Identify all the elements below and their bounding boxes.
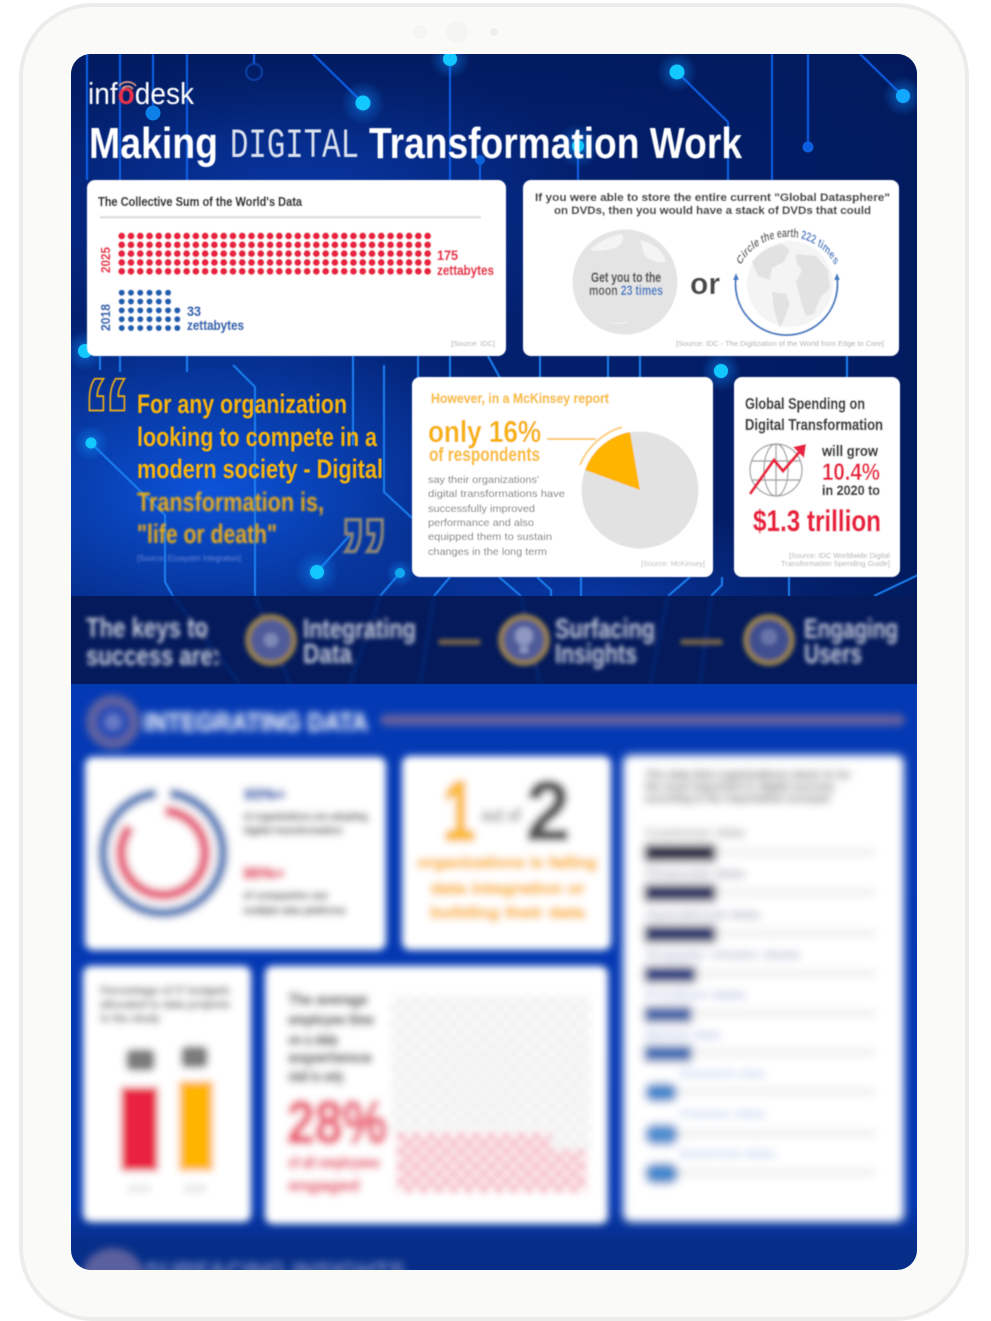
stat: only 16% (428, 414, 541, 466)
next section heading: SURFACING INSIGHTS (145, 1258, 405, 1285)
pull quote: Transformation is, (137, 487, 324, 517)
title: Making (89, 119, 218, 168)
bar labels (645, 828, 801, 1160)
dot chart: 2018 (98, 288, 244, 333)
big numerals: 1 (443, 764, 475, 858)
key: engaging users: Engaging (804, 613, 898, 644)
yellow text: building their data (430, 903, 586, 922)
icon: globe with rising arrow (750, 444, 806, 496)
key: engaging users (746, 613, 898, 669)
body text: on a data (288, 1030, 338, 1049)
stat: 85%: 85%+ (243, 864, 285, 883)
dot chart: 2018: zettabytes (187, 317, 244, 333)
growth text: $1.3 trillion (753, 505, 881, 538)
dot chart: 2018: 33 (187, 303, 201, 319)
panel: 28% waffle (265, 966, 608, 1224)
panel heading (100, 985, 230, 1025)
stat: 85%: multiple data platforms (243, 905, 346, 917)
stat: 93%: of organizations are adopting (243, 811, 368, 823)
earth illustration with orbit arrow: Circle the earth 222 times (736, 228, 838, 265)
pull quote: looking to compete in a (137, 422, 378, 452)
spending heading (745, 396, 883, 434)
pull quote: "life or death" (137, 519, 277, 549)
spending heading: Global Spending on (745, 396, 865, 413)
source: [Source: IDC - The Digitization of the World from Edge to Core] (676, 339, 884, 348)
band heading (86, 612, 220, 671)
stat: only 16%: only 16% (428, 414, 541, 449)
pull quote (88, 377, 386, 564)
key: engaging users: Users (804, 638, 862, 669)
yellow text: organizations is failing (417, 853, 597, 872)
body text: successfully improved (428, 503, 535, 515)
source: [Source: McKinsey] (641, 559, 705, 568)
stat: 85% (243, 864, 346, 917)
section: integrating data (71, 684, 917, 1312)
pie chart: 16% (547, 427, 698, 548)
source: Transformation Spending Guide] (781, 559, 890, 568)
key: integrating data: Data (303, 638, 352, 669)
band heading: The keys to (86, 612, 208, 643)
key: surfacing insights: Surfacing (555, 613, 655, 644)
key: integrating data: Integrating (303, 613, 416, 644)
big numerals: out of (481, 805, 521, 827)
circuit lines (87, 54, 918, 596)
panel: donut statistics (85, 757, 386, 950)
big numerals: 2 (526, 764, 570, 858)
yellow text (417, 853, 597, 922)
body text: changes in the long term (428, 546, 547, 558)
panel: McKinsey report (412, 377, 713, 577)
panel heading: the most important to digital success (645, 781, 835, 793)
stat: 85%: of companies use (243, 890, 328, 902)
stat: 28%: 28% (287, 1089, 387, 1156)
source (781, 551, 890, 568)
bar labels: Market data (645, 1030, 721, 1041)
body text: employee time (288, 1010, 374, 1029)
background: dark blue circuit board (71, 54, 917, 596)
dot chart: 2018: 2018 (98, 304, 113, 331)
bar labels: Supply chain data (645, 950, 801, 961)
moon illustration: Get you to the (591, 270, 661, 285)
pull quote: modern society - Digital (137, 454, 383, 484)
bar labels: Customer data (645, 828, 746, 839)
connector (438, 639, 481, 645)
glowing circuit nodes (65, 39, 923, 594)
dot chart: 2025: 175 (437, 247, 458, 263)
body text (428, 474, 565, 558)
body text: experience (288, 1048, 372, 1067)
section heading: INTEGRATING DATA (144, 707, 368, 737)
band: the keys to success (71, 596, 917, 684)
panel heading: in the study (100, 1013, 161, 1025)
body text: The average (288, 990, 368, 1009)
source: [Source: IDC] (451, 339, 495, 348)
source: [Source: IDC Worldwide Digital (789, 551, 890, 560)
body text: say their organizations' (428, 474, 539, 486)
key: surfacing insights: Insights (555, 638, 637, 669)
body text: visit is only (288, 1067, 344, 1086)
key: surfacing insights (501, 613, 655, 669)
pull quote: For any organization (137, 389, 347, 419)
panel heading: Percentage of IT budgets (100, 985, 230, 997)
moon illustration: moon 23 times (589, 283, 663, 298)
next section heading (81, 1248, 405, 1312)
panel heading: The data that organizations deem to be (645, 769, 850, 781)
key: integrating data (248, 613, 416, 669)
bar chart (121, 1046, 213, 1195)
icon: opening quote: “ (82, 355, 132, 480)
panel intro text (535, 192, 890, 217)
moon illustration (572, 230, 678, 334)
title: DIGITAL (230, 122, 359, 170)
big numerals (443, 764, 570, 858)
bar chart: 2019 (128, 1184, 151, 1195)
body text: performance and also (428, 517, 534, 529)
title (90, 126, 742, 168)
band heading: success are: (86, 640, 220, 671)
bar rows (644, 844, 875, 1184)
panel: ranked bars (623, 755, 904, 1222)
panel intro text: on DVDs, then you would have a stack of DVDs that could (554, 205, 871, 217)
bar labels: Operational data (645, 910, 761, 921)
growth text (753, 443, 881, 538)
logo: infodesk: infodesk (88, 76, 194, 111)
dot chart: 2025: 2025 (98, 247, 113, 273)
stat: 28% (287, 1089, 387, 1195)
stat: 93% (243, 785, 368, 837)
or: or (690, 266, 720, 301)
stat: 93%: 93%+ (244, 785, 286, 804)
panel heading: allocated to data projects (100, 999, 230, 1011)
stat: 28%: engaged (288, 1176, 360, 1195)
growth text: will grow (821, 443, 878, 460)
report heading: However, in a McKinsey report (431, 390, 609, 406)
panel heading (645, 769, 850, 805)
bar labels: External data (680, 1149, 776, 1160)
stat: 93%: digital transformation (243, 825, 343, 837)
bar labels: Product data (645, 990, 746, 1001)
body text: digital transformations have (428, 488, 565, 500)
quote source: [Source: Ecosystm Integration] (137, 554, 241, 563)
panel intro text: If you were able to store the entire current "Global Datasphere" (535, 192, 890, 204)
body text (288, 990, 374, 1086)
connector (680, 639, 723, 645)
panel: DVD stack comparison (522, 179, 900, 357)
waffle chart (392, 995, 590, 1193)
panel heading: according to the respondents surveyed (645, 793, 830, 805)
panel: collective sum of the world's data (87, 180, 506, 356)
section heading (86, 695, 905, 749)
dot chart: 2025: zettabytes (437, 262, 494, 278)
stat: 28%: of all employees (288, 1153, 380, 1172)
title: Transformation Work (369, 119, 742, 168)
bar labels: Research data (680, 1069, 766, 1080)
spending heading: Digital Transformation (745, 417, 883, 434)
growth text: 10.4% (822, 459, 880, 486)
growth text: in 2020 to (822, 482, 880, 498)
screen (71, 54, 917, 1270)
panel: 1 in 2 (402, 756, 611, 950)
dot chart: 2025 (98, 232, 494, 278)
logo: infodesk (89, 80, 194, 106)
panel heading: The Collective Sum of the World's Data (98, 194, 303, 209)
donut chart (103, 793, 223, 913)
yellow text: data integration or (430, 879, 585, 898)
bar labels: Financial data (645, 869, 746, 880)
icon: closing quote: ” (338, 496, 390, 621)
earth illustration with orbit arrow (732, 228, 840, 337)
panel: global spending (734, 377, 900, 577)
stat: only 16%: of respondents (429, 445, 540, 466)
panel: two bars (83, 966, 251, 1222)
bar chart: 2020 (184, 1184, 207, 1195)
body text: equipped them to sustain (428, 531, 552, 543)
bar labels: Partner data (680, 1109, 766, 1120)
